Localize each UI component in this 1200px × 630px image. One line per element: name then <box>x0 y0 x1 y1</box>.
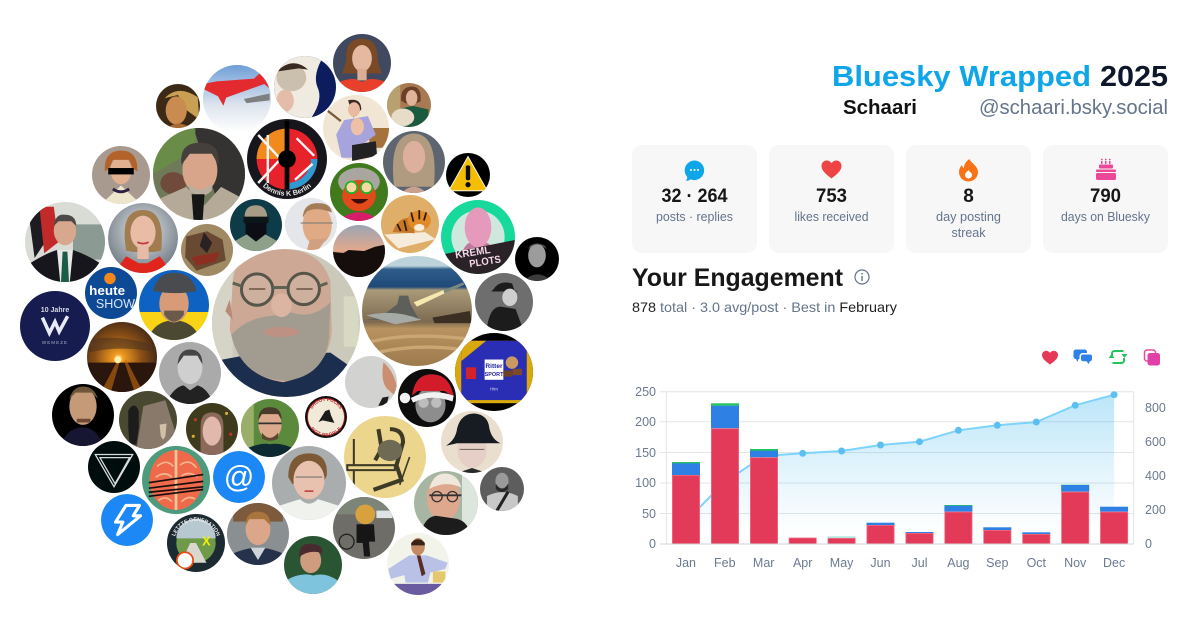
avatar: black and white smiling man <box>159 342 221 404</box>
avatar: woman in red blazer <box>108 203 178 273</box>
avatar: blue at-sign <box>213 451 265 503</box>
avatar: rocket launch landscape <box>362 256 472 366</box>
icon: replies legend <box>1074 350 1092 364</box>
avatar: tied-up brain <box>142 446 210 514</box>
stat value: 32 · 264 <box>662 186 728 207</box>
avatar: blue at-sign: @ <box>224 461 254 494</box>
avatar: man with glasses and beard <box>241 399 299 457</box>
left axis labels: 250 <box>635 385 656 399</box>
avatar: pin-up illustration <box>323 95 390 161</box>
left axis labels: 150 <box>635 446 656 460</box>
avatar: Kreml Plots <box>441 200 515 274</box>
month labels: Feb <box>714 556 736 570</box>
stat label: day posting <box>936 210 1001 224</box>
month labels: Mar <box>753 556 774 570</box>
right axis labels <box>1145 401 1166 551</box>
stat label: posts · replies <box>656 210 733 224</box>
heading: Your Engagement: Your Engagement <box>632 264 844 292</box>
display name: Schaari <box>843 97 917 119</box>
month labels: Sep <box>986 556 1008 570</box>
avatar: young man in blue t-shirt <box>284 536 342 594</box>
icon: flame <box>959 159 978 182</box>
avatar: old painting <box>181 224 233 276</box>
avatar: Letzte Generation: LETZTE GENERATION <box>172 517 220 536</box>
left axis labels: 200 <box>635 415 656 429</box>
avatar: 10 Jahre WeMeZe: WEMEZE <box>42 340 68 345</box>
avatar: person walking with dog <box>119 391 177 449</box>
stacked bars: replies <box>672 406 1128 534</box>
avatar: Shoot Pucks Not People badge: NOT PEOPLE <box>310 426 342 436</box>
avatar: Letzte Generation <box>167 514 225 572</box>
stat value: 790 <box>1090 186 1121 207</box>
month labels: Jul <box>912 556 927 570</box>
avatar: yellow sketch <box>344 416 426 498</box>
right axis labels: 800 <box>1145 401 1166 415</box>
avatar: orange muppet with green glasses <box>330 163 388 221</box>
right axis labels: 600 <box>1145 435 1166 449</box>
month labels: Nov <box>1064 556 1087 570</box>
avatar: heute show: heute <box>89 283 125 298</box>
avatar: small sunset <box>333 225 385 277</box>
month labels: May <box>830 556 854 570</box>
icon: info <box>855 270 869 284</box>
stat label: days on Bluesky <box>1061 210 1151 224</box>
icon: reposts legend <box>1108 351 1128 363</box>
avatar: older man with glasses <box>414 471 478 535</box>
panel: likes received <box>769 145 894 253</box>
left axis labels: 100 <box>635 476 656 490</box>
avatar: black and white actor <box>515 237 559 281</box>
avatar: Ritter Sport chocolate: Hirn <box>490 387 499 392</box>
avatar: painted man in shirt and tie <box>387 533 449 595</box>
avatar: man on dark background <box>52 384 114 446</box>
chart legend <box>1042 350 1160 366</box>
icon: birthday cake <box>1096 159 1116 180</box>
avatar: child with censored eyes <box>92 146 150 204</box>
stat label: streak <box>952 226 986 240</box>
avatar: bearded man with guitar strap <box>480 467 524 511</box>
avatar: 10 Jahre WeMeZe: 10 Jahre <box>41 307 69 314</box>
title: Bluesky Wrapped <box>832 61 1091 93</box>
avatar: red plane in sky <box>203 65 271 126</box>
avatar: Letzte Generation: X <box>202 533 211 548</box>
avatar: Shoot Pucks Not People badge: SHOOT PUCKS <box>310 398 342 409</box>
avatar: warning sign <box>446 153 490 197</box>
avatar: Kreml Plots: KREML <box>455 245 492 261</box>
panel: day posting streak <box>906 145 1031 253</box>
avatar: man in bucket hat <box>441 411 503 473</box>
avatar: santa hat selfie <box>398 369 456 427</box>
avatar: Ritter Sport chocolate <box>455 333 533 411</box>
month labels: Jan <box>676 556 696 570</box>
avatar: smiling man in beige jacket <box>153 128 245 220</box>
stacked bars: likes <box>672 429 1128 544</box>
stat value: 8 <box>963 186 974 207</box>
avatar: grey wall with ear <box>345 356 397 408</box>
avatar: blue lightning bolt <box>101 494 153 546</box>
avatar: inverted triangle <box>88 441 140 493</box>
stacked bars: reposts <box>672 403 1089 538</box>
right axis labels: 200 <box>1145 503 1166 517</box>
avatar: woman with dog <box>387 83 431 127</box>
stat label: likes received <box>794 210 869 224</box>
avatar: man in suit on TV <box>227 503 289 565</box>
avatar: Ritter Sport chocolate: SPORT <box>485 372 504 378</box>
avatar: tiger illustration <box>381 195 439 253</box>
engagement chart <box>635 385 1166 570</box>
avatar: man in hat, black and white <box>475 273 533 331</box>
avatar cluster <box>20 34 559 595</box>
panel: posts and replies <box>632 145 757 253</box>
avatar: smiling man with glasses <box>285 198 337 250</box>
avatar: woman in christmas wreath <box>186 403 238 455</box>
avatar: illustrated man on Ukraine colours <box>139 270 209 340</box>
avatar: orange sunset <box>87 322 157 392</box>
avatar: Kreml Plots: PLOTS <box>469 254 502 270</box>
month labels: Oct <box>1027 556 1047 570</box>
month labels: Aug <box>947 556 970 570</box>
engagement summary: 878 total · 3.0 avg/post · Best in February <box>632 299 897 315</box>
handle: @schaari.bsky.social <box>979 97 1168 119</box>
avatar: Ritter Sport chocolate: Ritter <box>485 363 503 370</box>
month labels <box>676 556 1125 570</box>
avatar: person with yellow hat on street <box>333 497 395 559</box>
left axis labels <box>635 385 656 551</box>
left axis labels: 50 <box>642 507 656 521</box>
avatar: blonde woman <box>383 131 445 193</box>
avatar: man in suit before Reichstag <box>25 202 105 282</box>
avatar: main profile portrait <box>212 249 360 397</box>
avatar: Dennis K Berlin logo: Dennis K Berlin <box>262 182 312 196</box>
right axis labels: 0 <box>1145 537 1152 551</box>
icon: heart <box>822 160 842 178</box>
left axis labels: 0 <box>649 537 656 551</box>
avatar: person in blue hood with drawing <box>274 56 336 118</box>
title: 2025 <box>1100 61 1168 93</box>
avatar: woman with glasses in white <box>272 446 346 520</box>
avatar: older woman <box>156 84 200 128</box>
stat value: 753 <box>816 186 847 207</box>
icon: likes legend <box>1042 351 1058 364</box>
cumulative line <box>686 391 1118 521</box>
month labels: Apr <box>793 556 812 570</box>
area under cumulative line <box>686 395 1114 544</box>
right axis labels: 400 <box>1145 469 1166 483</box>
avatar: heute show: SHOW <box>96 296 136 311</box>
avatar: Shoot Pucks Not People badge <box>305 396 347 438</box>
icon: speech bubble <box>685 160 704 181</box>
panel: days on Bluesky <box>1043 145 1168 253</box>
avatar: masked person in sunglasses <box>230 199 282 251</box>
icon: quotes legend <box>1144 350 1160 366</box>
avatar: heute show <box>85 267 137 319</box>
avatar: 10 Jahre WeMeZe <box>20 291 90 361</box>
month labels: Jun <box>870 556 891 570</box>
avatar: woman in red top <box>333 34 391 92</box>
avatar: Dennis K Berlin logo <box>247 119 327 199</box>
month labels: Dec <box>1103 556 1125 570</box>
